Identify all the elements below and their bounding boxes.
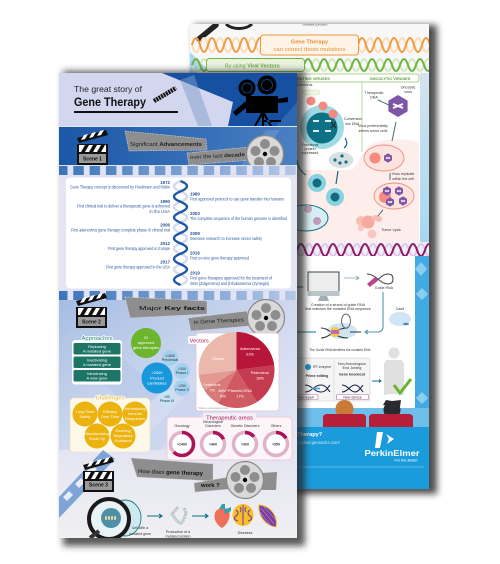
bubbles: product candidates: Phase I [176,371,188,375]
icon: green check [394,379,411,393]
pie chart: Others [212,356,224,361]
ribbon: significant advancements: Significant Advancements [130,142,202,148]
timeline left column: First gene therapy approved in Europe [108,246,171,251]
heading: therapeutic areas: Therapeutic areas [206,416,253,422]
pie chart: Plasmid DNA [228,388,252,393]
arrow [147,514,162,518]
pie chart: Retrovirus [251,370,269,375]
ring: neurological disorders: Neurological [203,420,223,424]
icon: Cas9 [389,307,411,326]
challenge bubbles: Safety [79,414,91,419]
timeline left column [70,180,171,270]
title: The great story of [74,84,143,94]
icon: mutated protein [172,507,186,524]
integrating virus cell: expressed [302,151,318,155]
pie chart: 17% [236,394,244,398]
oncolytic virus [358,86,416,141]
heading: integrating and oncolytic viruses: RATING VIRUSES [297,76,330,81]
timeline left column: 2017 [160,260,171,264]
icon: muscle [259,505,276,527]
oncolytic virus: virus [404,90,412,94]
front infographic page [59,73,297,539]
icon: film reel [226,462,264,498]
timeline left column: Gene Therapy concept is discovered by Friedmann and Robin [70,184,171,190]
pie chart [198,332,275,408]
clapperboard: scene 3: Scene 3 [89,482,108,488]
icon: monitor [308,272,340,301]
text: production of mutated protein: Production of a [166,530,190,534]
arrow: guide RNA to complex [365,292,383,334]
panel: header [59,73,297,126]
timeline left column: First clinical trial to deliver a therapeutic gene is achieved [77,204,171,208]
panel: repair pathways: End Joining [343,366,361,370]
icon: DNA complex [321,314,361,339]
tumour cell infected: Virus replicate [392,172,414,176]
footer: applied genomics.com/ [297,440,341,445]
bubbles: product candidates: >300 [178,367,186,371]
icon: DNA helix [174,181,187,285]
film strip middle [59,289,297,300]
ring: neurological disorders: Disorders [205,424,221,428]
text: cell with a mutated gene: Cell with a [132,526,148,530]
arrow [192,514,208,518]
challenge bubbles: Scale Up [89,436,106,441]
clapperboard: scene 1 [77,130,108,165]
bubbles: product candidates: >90 [164,395,170,399]
challenge bubbles: Guidance [114,438,132,443]
challenge bubbles: Neutralizing [124,406,146,411]
text: cell with a mutated gene: mutated gene [129,532,151,536]
tumour lysis: Tumor Lysis [381,228,401,232]
integrating virus cell: into DNA [345,122,360,126]
tumour lysis [356,215,401,238]
ribbon: major key facts: Major Key facts [139,306,205,312]
ribbon: how does gene therapy work: work ? [200,483,220,489]
text: diseases: Diseases [238,531,253,535]
ring: genetic disorders: Genetic Disorders [231,424,260,428]
panel: repair pathways: DNA repair [296,396,315,400]
pie chart: AAV* [218,388,228,393]
text: production of mutated protein: mutated protein [166,534,190,538]
pie chart: 8% [220,394,226,398]
timeline right column: First gene therapies approved for the treatment of [190,276,273,280]
light blue corner [190,52,206,73]
tumour cell infected [364,145,414,181]
timeline right column: Intensive research to increase vector safety [190,236,263,241]
icon: film reel [246,136,284,172]
heading: approaches: Approaches [82,336,113,342]
ribbon: major key facts [125,297,249,331]
approach rows [74,343,120,382]
ring: others [264,424,288,456]
bubbles: product candidates [131,328,190,407]
panel: repair pathways: New device [343,396,362,400]
ring: neurological disorders [202,420,224,456]
footer [297,427,429,489]
title [74,84,178,113]
text: cell with a mutated gene [129,526,151,536]
panel: challenges [70,396,150,452]
oncolytic virus: infects tumor cells [359,129,388,133]
timeline right column: 2009 [190,231,200,236]
panel: repair pathways: Non-Homologous [338,362,366,366]
clapperboard: scene 2: Scene 2 [82,320,101,326]
heading: integrating and oncolytic viruses [290,74,419,82]
pie chart: 7% [209,388,215,392]
callout: gene therapy can correct: can correct these mutations [274,47,346,53]
clapperboard: scene 2 [76,293,107,328]
panel: vectors pie [188,332,279,411]
panel: approaches [72,336,122,384]
decorative film strip [180,75,212,126]
panel: CRISPR steps [290,256,429,489]
oncolytic virus: Oncolytic [401,86,416,90]
timeline left column: 2012 [160,241,171,246]
logo: PerkinElmer [364,432,420,462]
ribbon: significant advancements: over the last decade [190,152,245,161]
icon: movie camera [233,76,288,126]
timeline right column: SMA (Zolgensma) and β-thalassemia (Zynteglo) [190,281,269,286]
timeline left column: First adenovirus gene therapy complete phase III clinical trial [71,228,170,232]
timeline left column: 1990 [160,199,171,204]
audience: viewers in cinema seats [323,400,413,427]
text: guide RNA creation: that matches the mutated DNA sequence [305,307,371,311]
pie chart: 18% [256,376,264,380]
integrating virus cell [297,83,362,155]
tumour background [297,139,419,242]
panel: repair pathways [290,358,370,401]
ribbon: major key facts: in Gene Therapies [194,317,244,326]
panel: repair pathways: RT enzyme [313,365,331,369]
bubbles: product candidates: approved [138,340,154,345]
challenge bubbles: Over Time [101,414,120,419]
clapperboard: scene 1: Scene 1 [83,156,102,162]
challenge bubbles: Evolving [115,428,131,433]
timeline right column: 2016 [190,250,200,256]
logo: PerkinElmer: For the Better [394,458,418,462]
logo: PerkinElmer: PerkinElmer [364,449,420,458]
timeline left column: 2006 [160,222,171,228]
film strip top [59,165,297,178]
heading: vectors: Vectors [190,338,209,344]
timeline right column: 2003 [190,211,200,216]
pie chart: Lentivirus [203,382,221,387]
timeline right column [190,192,288,286]
ribbon: how does gene therapy work: How does gene therapy [138,469,204,477]
timeline right column: 2019 [190,270,200,276]
text: guide RNA identifies: The Guide RNA identifies the mutated DNA [310,348,371,352]
approach rows: A mutated gene [83,362,112,367]
callout: by using viral vectors: By using Viral Vectors [225,64,280,70]
integrating virus cell: Functional [302,143,318,147]
oncolytic virus: Therapeutic [365,91,384,95]
icon: guide RNA: Guide RNA [375,286,394,290]
icon: person silhouette [384,348,404,395]
petri dish and daughter cells [297,138,354,232]
back page cut-off caption: mutated protein [303,22,327,26]
challenge bubbles: Regulatory [113,433,133,438]
challenge bubbles: Efficacy [103,409,117,414]
footer: Therapy? [297,432,323,438]
approach rows: Replacing [88,344,106,349]
panel: viral vectors [297,73,429,242]
arrow to guide RNA [344,276,359,280]
bubbles: product candidates: Product [150,376,165,380]
text: production of mutated protein [166,530,190,538]
icon: heart [214,504,231,528]
panel: therapeutic areas [167,413,292,460]
bubbles: product candidates: Preclinical [162,358,178,362]
ring: others: >350 [272,442,280,446]
ring: genetic disorders: >300 [241,442,249,446]
icon: DNA chain [154,88,176,101]
icon: brain [232,504,254,526]
tumour cell infected: within the cell [392,177,414,181]
panel: scene 2 background [59,300,297,450]
bubbles: product candidates: candidates [147,380,167,386]
icon: film reel [248,300,284,336]
approach rows: A mutated gene [83,348,112,354]
tumour cell with replicated viruses [374,183,414,217]
approach rows: Introducing [87,371,107,376]
front page shadow [63,71,305,546]
heading: integrating and oncolytic viruses: ONCOLYTIC VIRUSES [370,76,411,81]
magenta DNA wave [297,242,433,256]
bubbles: product candidates: >1500 [165,354,175,358]
timeline left column: in the USA [149,209,170,214]
oncolytic virus: DNA [370,96,378,100]
bubbles: product candidates: >2400 [151,370,163,375]
timeline left column: 1972 [160,180,171,185]
panel: timeline [66,178,291,288]
approach rows: Inactivating [87,358,107,362]
panel: repair pathways: Prime editing [306,374,328,378]
title: Gene Therapy [74,95,146,109]
panel: scene 3 background [59,450,297,538]
panel: vectors pie: *Adeno-associated virus [198,406,229,410]
bubbles: product candidates: Phase III [160,399,174,403]
timeline right column: First ex-vivo gene therapy approved [190,256,250,260]
ring: oncology: Oncology [174,424,190,428]
timeline left column: First gene therapy approved in the USA [106,264,170,270]
ring: oncology: >1400 [177,442,187,446]
bubbles: product candidates: gene therapies [133,345,159,350]
ring: genetic disorders [231,424,260,456]
timeline right column: 1989 [190,192,200,196]
ribbon: significant advancements [125,131,252,165]
back page shadow [194,25,437,494]
ring: neurological disorders: >400 [209,442,217,446]
ring: oncology [170,424,194,456]
challenge bubbles: Manufacturing [84,431,110,436]
panel: repair pathways: Gene knockout [339,372,366,376]
icon: Cas9: Cas9 [396,307,404,311]
icon: guide RNA [367,274,394,290]
callout: by using viral vectors [206,58,304,72]
challenge bubbles [72,402,148,448]
integrating virus cell: Conversion [344,117,362,121]
ribbon: how does gene therapy work [131,458,277,492]
ring: others: Others [271,424,282,428]
bubbles: product candidates: >250 [178,384,186,388]
clapperboard: scene 3 [83,457,114,492]
integrating virus cell: Lentivirus [297,83,313,87]
callout: gene therapy can correct [260,35,358,55]
timeline right column: The complete sequence of the human genome is identified [190,216,288,221]
integrating virus cell: protein [304,147,316,151]
timeline right column: First approved protocol to use gene transfer into humans [190,196,284,202]
orange DNA wave [192,38,430,52]
heading: challenges: Challenges [95,396,125,402]
text: guide RNA creation [305,303,371,311]
approach rows: A new gene [87,376,108,380]
oncolytic virus: Virus preferentially [358,124,388,128]
challenge bubbles: Immune [128,411,143,416]
bubbles: product candidates: Phase II [175,388,189,392]
pie chart: 23% [246,352,254,356]
green DNA wave [192,59,432,71]
bubbles: product candidates: 20 [144,335,149,340]
challenge bubbles: Long Term [76,409,95,414]
text: guide RNA creation: Creation of a strand of guide RNA [311,303,366,307]
challenge bubbles: Responses [125,416,145,421]
callout: gene therapy can correct: Gene Therapy [291,40,329,46]
pie chart: Adenovirus [240,346,260,351]
icon: magnifier top [199,24,252,39]
panel: scene 1 banner [59,127,297,172]
icon: magnified cell [89,499,141,539]
back infographic page [190,22,433,489]
arrow to person [372,380,381,382]
